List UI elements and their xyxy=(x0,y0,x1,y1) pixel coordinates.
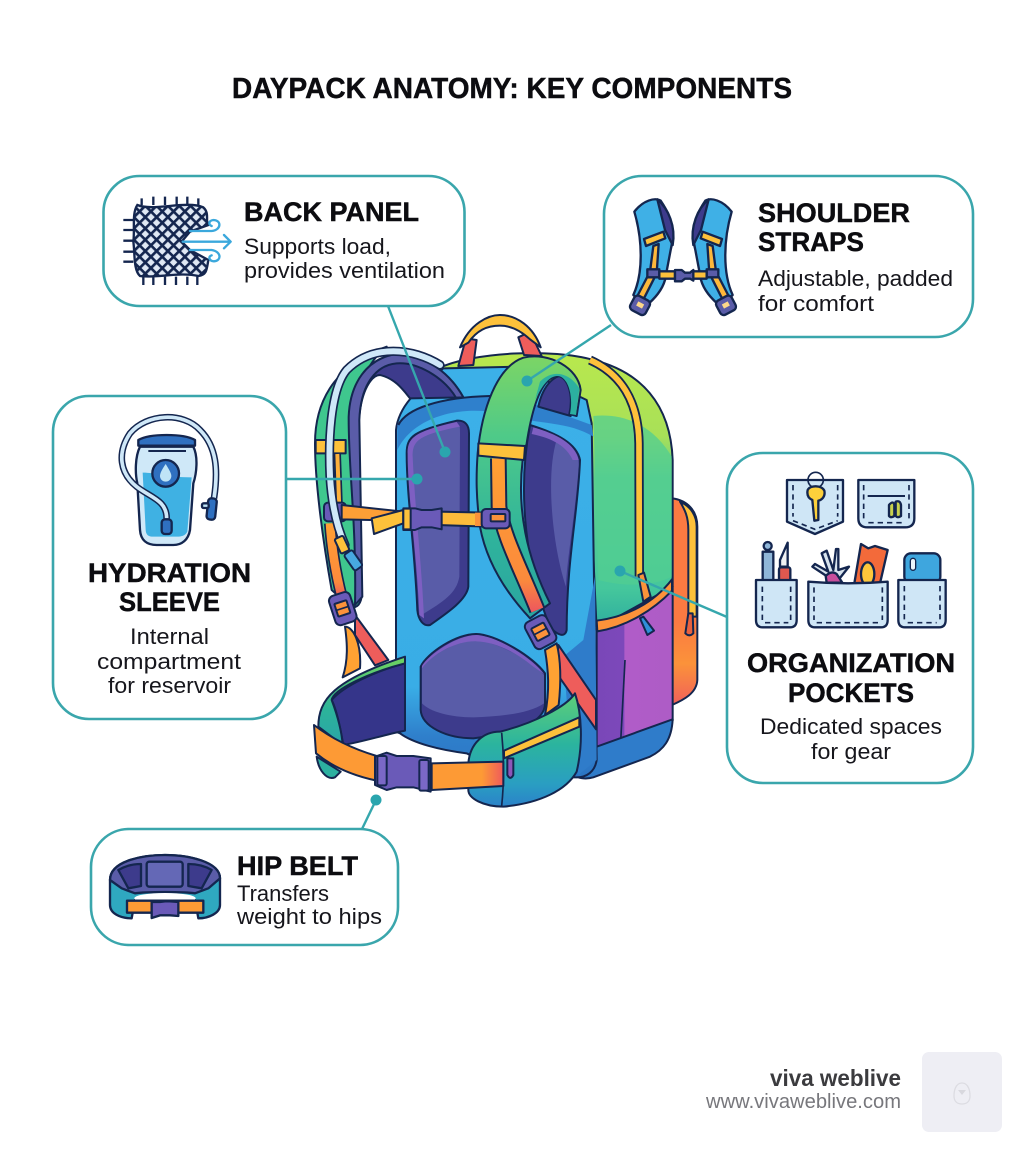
top handle xyxy=(458,315,542,366)
pens and tools xyxy=(756,542,797,627)
panel: shoulder straps xyxy=(604,176,973,337)
description: for reservoir xyxy=(108,673,231,698)
icon: shoulder straps xyxy=(629,199,737,316)
phone pocket xyxy=(898,553,946,627)
description: Transfers xyxy=(237,881,329,906)
description: compartment xyxy=(97,649,241,674)
heading: HIP BELT xyxy=(237,851,358,881)
panel: hip belt xyxy=(91,829,398,945)
right strap xyxy=(693,199,737,316)
description: Adjustable, padded xyxy=(758,266,953,291)
pocket with zipper xyxy=(858,480,914,527)
connector: shoulder straps xyxy=(522,325,611,386)
heading: SHOULDER xyxy=(758,198,910,228)
description: Supports load, xyxy=(244,234,391,259)
icon: hip belt xyxy=(110,855,220,918)
description: for comfort xyxy=(758,291,874,316)
footer brand: viva weblive xyxy=(770,1065,901,1091)
footer brand: www.vivaweblive.com xyxy=(705,1091,901,1113)
description: Dedicated spaces xyxy=(760,714,942,739)
side pocket xyxy=(672,498,697,705)
near shoulder strap xyxy=(477,356,596,729)
panel: hydration sleeve xyxy=(53,396,286,719)
main compartment xyxy=(438,353,673,630)
multi-tool and snack xyxy=(808,544,888,627)
hip belt xyxy=(314,657,581,807)
front panel xyxy=(396,367,597,777)
panel: shoulder straps: STRAPS xyxy=(758,227,864,257)
pocket with key xyxy=(787,472,843,534)
connector: hydration sleeve xyxy=(286,474,422,484)
panel: hydration sleeve: SLEEVE xyxy=(119,587,220,617)
footer brand xyxy=(705,1065,901,1113)
description: Internal xyxy=(130,624,209,649)
title: DAYPACK ANATOMY: KEY COMPONENTS xyxy=(232,73,792,105)
right back pad xyxy=(524,425,580,635)
illustration: daypack xyxy=(314,315,697,807)
icon: hydration reservoir xyxy=(122,417,217,545)
lower pocket xyxy=(577,573,673,778)
icon: pockets with gear xyxy=(756,472,946,627)
connector: back panel xyxy=(388,306,450,458)
lumbar pad xyxy=(421,634,545,738)
connector: hip belt xyxy=(362,794,382,829)
connector: organization pockets xyxy=(614,566,727,617)
description: for gear xyxy=(811,739,891,764)
panel: organization pockets: POCKETS xyxy=(788,678,914,708)
description: provides ventilation xyxy=(244,258,445,283)
heading: HYDRATION xyxy=(88,558,251,588)
upper back pad xyxy=(407,421,469,625)
far shoulder strap xyxy=(315,347,463,677)
heading: BACK PANEL xyxy=(244,197,419,227)
sternum strap and buckle xyxy=(342,505,510,534)
left strap xyxy=(629,199,673,316)
description: weight to hips xyxy=(236,904,382,929)
heading: ORGANIZATION xyxy=(747,648,955,678)
logo placeholder xyxy=(922,1052,1002,1132)
panel: organization pockets xyxy=(727,453,973,783)
panel: back panel xyxy=(104,176,464,306)
icon: mesh with airflow xyxy=(123,197,231,285)
